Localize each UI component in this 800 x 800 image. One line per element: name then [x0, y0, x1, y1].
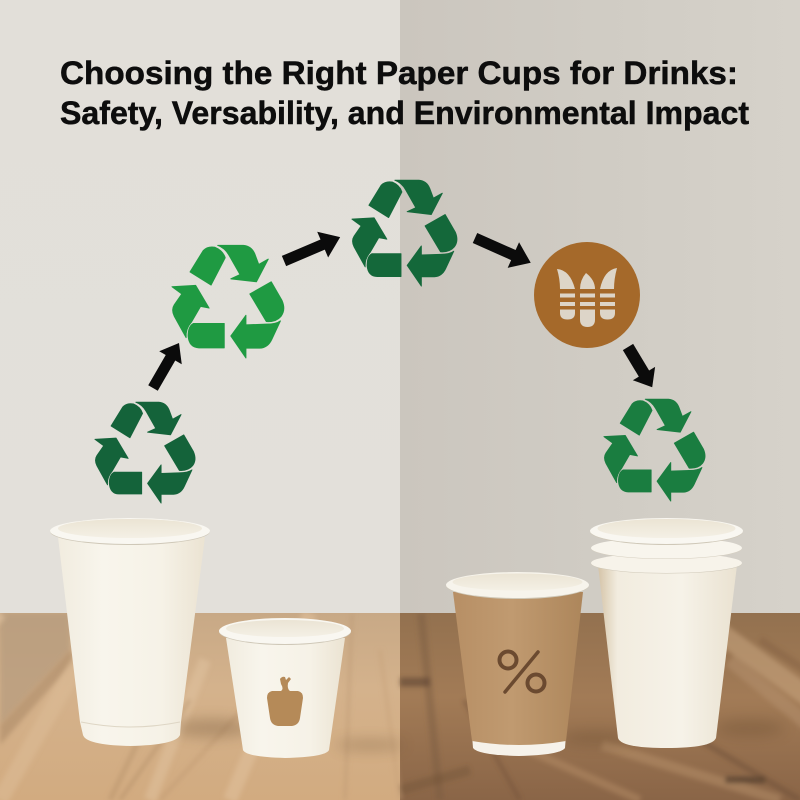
arrow: recycling 2 to 3 — [279, 224, 346, 274]
icon: recycling symbol 2 — [172, 245, 284, 358]
wooden table — [0, 613, 800, 800]
icon: recycling symbol 1 — [95, 402, 195, 503]
small white paper cup with logo — [219, 618, 351, 758]
cup shadows — [172, 719, 785, 750]
title: Choosing the Right Paper Cups for Drinks: — [60, 55, 738, 91]
icon: recycling symbol 3 — [352, 180, 457, 286]
white tall paper cup — [50, 518, 210, 746]
icon: brown bag logo — [267, 677, 303, 726]
stacked white paper cups — [590, 518, 743, 748]
title: Safety, Versability, and Environmental Impact — [60, 95, 749, 131]
arrow: recycling 3 to wheat badge — [469, 225, 536, 276]
icon: recycling symbol 5 — [604, 399, 705, 501]
icon: percent sign — [500, 652, 544, 692]
icon: brown wheat badge — [534, 242, 640, 348]
arrow: wheat badge to recycling 5 — [617, 340, 663, 394]
arrow: recycling 1 to 2 — [142, 336, 190, 394]
kraft brown paper cup — [446, 572, 589, 756]
wall background — [0, 0, 800, 620]
title — [60, 55, 749, 131]
